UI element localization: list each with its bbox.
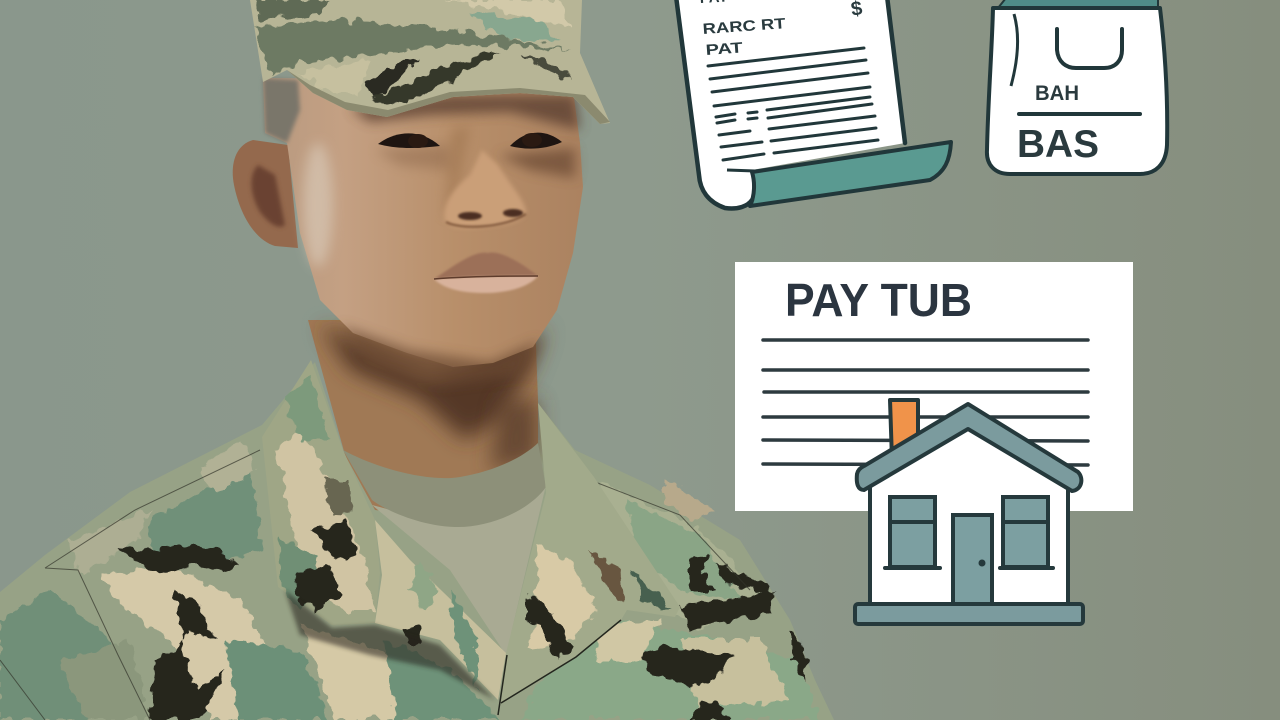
hair stubble <box>263 78 300 143</box>
nose <box>444 150 526 228</box>
document lines <box>763 340 1088 465</box>
right eye <box>510 133 562 149</box>
bag contents <box>998 0 1158 8</box>
brim shadow <box>350 95 580 130</box>
soldier portrait <box>0 0 834 720</box>
ear <box>233 140 298 248</box>
face <box>263 78 583 385</box>
roof <box>857 404 1081 491</box>
t-shirt <box>343 443 546 655</box>
right window <box>1000 497 1053 568</box>
bag label: BAS: BAS <box>1017 123 1099 166</box>
door <box>953 515 992 605</box>
right collar <box>501 403 680 703</box>
jaw shadow <box>340 325 540 385</box>
scroll fold <box>750 142 951 206</box>
pay tub document panel <box>735 262 1133 511</box>
left shoulder seam <box>0 450 260 720</box>
eye shadow right <box>498 148 575 178</box>
right shoulder seam <box>590 480 750 590</box>
cheek highlight <box>303 143 333 267</box>
pay stub paper icon <box>675 0 951 209</box>
paper text lines <box>708 48 878 160</box>
house icon <box>855 400 1083 624</box>
left lapel <box>375 520 506 700</box>
document title: PAY TUB <box>785 274 972 326</box>
left window <box>885 497 940 568</box>
bag fold crease <box>1011 14 1018 86</box>
neck <box>308 320 545 520</box>
side nose shade <box>445 125 470 218</box>
bag label: BAH: BAH <box>1035 82 1079 105</box>
collar shadow <box>285 590 495 700</box>
shopping bag icon <box>987 0 1167 174</box>
lips <box>434 253 538 293</box>
house body <box>870 424 1068 605</box>
paper label: PAT: PAT <box>705 39 743 59</box>
foundation <box>855 604 1083 624</box>
camouflage hat <box>250 0 610 124</box>
left eye <box>378 133 440 148</box>
bag divider <box>1019 112 1140 116</box>
left collar <box>262 360 506 700</box>
bag body <box>987 8 1167 174</box>
paper sheet <box>675 0 905 208</box>
chimney <box>890 400 918 460</box>
bag handle <box>1057 29 1122 68</box>
uniform jacket <box>0 362 834 720</box>
paper label: RARC RT: RARC RT <box>702 15 786 38</box>
